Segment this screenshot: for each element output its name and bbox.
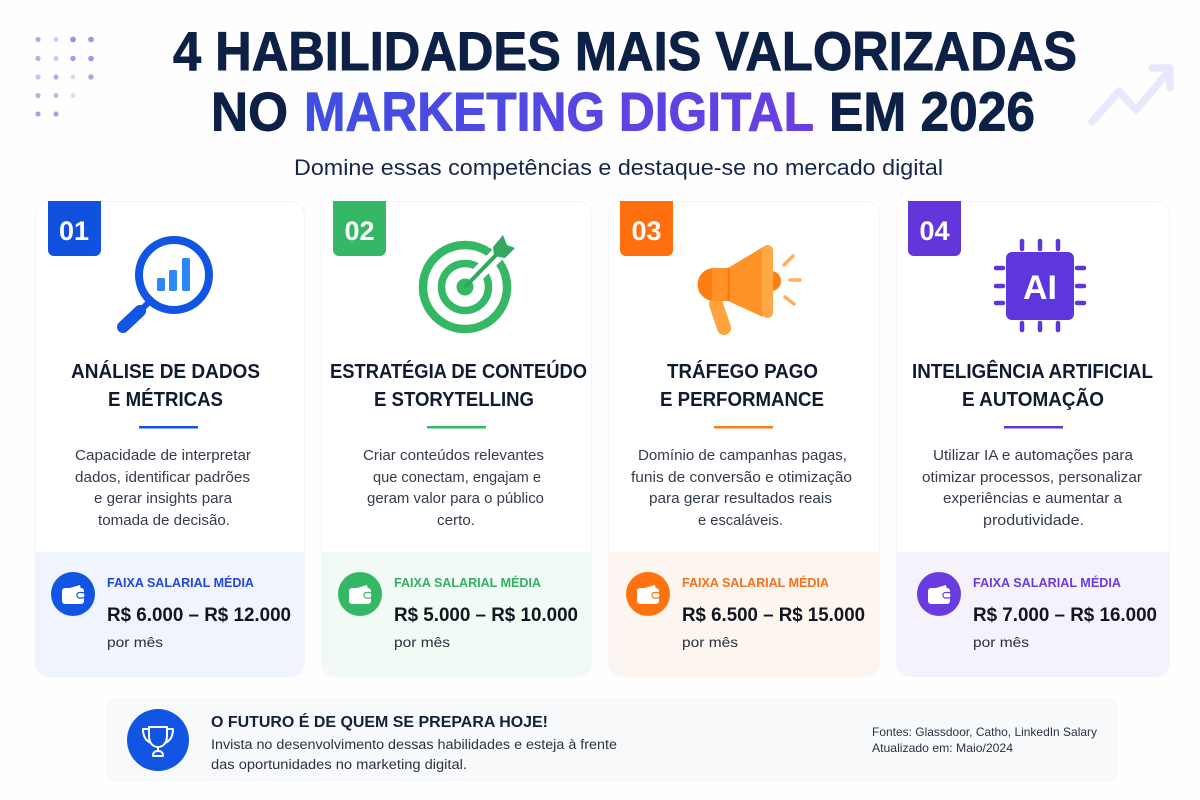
sources: Atualizado em: Maio/2024 (872, 741, 1013, 755)
salary: R$ 7.000 – R$ 16.000 (973, 604, 1157, 626)
salary panel background (322, 552, 592, 677)
description (631, 448, 852, 529)
description: produtividade. (983, 513, 1084, 529)
salary: FAIXA SALARIAL MÉDIA (973, 575, 1121, 590)
card background (36, 202, 304, 676)
heading: E STORYTELLING (374, 389, 534, 411)
callout text: das oportunidades no marketing digital. (211, 757, 467, 772)
heading (660, 360, 824, 411)
panel: footer callout (107, 698, 1117, 782)
panel: card 04 (896, 201, 1170, 677)
heading: INTELIGÊNCIA ARTIFICIAL (912, 359, 1153, 383)
title: 4 HABILIDADES MAIS VALORIZADAS (173, 20, 1077, 82)
description: otimizar processos, personalizar (922, 470, 1142, 486)
icon: AI chip: AI (1023, 269, 1057, 307)
description: Domínio de campanhas pagas, (638, 448, 847, 464)
salary (973, 575, 1157, 650)
title: NO (211, 80, 288, 142)
salary (107, 575, 291, 650)
salary: por mês (973, 634, 1029, 650)
card background (322, 202, 592, 676)
description: Criar conteúdos relevantes (363, 448, 544, 464)
decorative dot grid (35, 37, 94, 117)
title: EM 2026 (829, 80, 1035, 142)
description: que conectam, engajam e (373, 470, 541, 486)
description: experiências e aumentar a (943, 491, 1123, 507)
number badge (620, 201, 673, 256)
heading: E AUTOMAÇÃO (962, 388, 1104, 411)
icon: AI chip (996, 241, 1084, 330)
salary panel background (609, 552, 880, 677)
icon: trophy (127, 709, 189, 771)
number badge: 03 (631, 216, 662, 246)
number badge (48, 201, 101, 256)
salary: R$ 6.500 – R$ 15.000 (682, 604, 865, 626)
description: para gerar resultados reais (649, 491, 832, 507)
callout text: Invista no desenvolvimento dessas habilidades e esteja à frente (211, 737, 617, 752)
title: MARKETING DIGITAL (304, 80, 814, 142)
salary: FAIXA SALARIAL MÉDIA (394, 575, 541, 590)
salary (682, 575, 865, 650)
title (173, 20, 1077, 142)
heading: ESTRATÉGIA DE CONTEÚDO (330, 359, 587, 383)
salary panel background (897, 552, 1170, 677)
sources (872, 725, 1097, 755)
salary: R$ 5.000 – R$ 10.000 (394, 604, 578, 626)
heading (912, 359, 1153, 411)
description: funis de conversão e otimização (631, 470, 852, 486)
salary: FAIXA SALARIAL MÉDIA (682, 575, 829, 590)
callout text (211, 737, 617, 772)
description (363, 448, 544, 529)
heading (71, 360, 260, 411)
salary: R$ 6.000 – R$ 12.000 (107, 604, 291, 626)
description: geram valor para o público (367, 491, 544, 507)
description: Utilizar IA e automações para (933, 448, 1134, 464)
heading: E PERFORMANCE (660, 389, 824, 411)
salary panel background (36, 552, 304, 677)
description: certo. (437, 513, 475, 529)
callout heading: O FUTURO É DE QUEM SE PREPARA HOJE! (211, 712, 548, 731)
panel: card 03 (608, 201, 880, 677)
icon: wallet (338, 572, 382, 616)
salary: FAIXA SALARIAL MÉDIA (107, 575, 254, 590)
salary: por mês (682, 634, 738, 650)
number badge: 04 (919, 216, 950, 246)
panel: card 02 (322, 201, 592, 677)
number badge (908, 201, 961, 256)
subtitle: Domine essas competências e destaque-se no mercado digital (294, 155, 943, 180)
description: e gerar insights para (94, 491, 233, 507)
heading: TRÁFEGO PAGO (667, 360, 818, 383)
salary: por mês (394, 634, 450, 650)
heading: E MÉTRICAS (108, 388, 223, 411)
salary (394, 575, 578, 650)
description: e escaláveis. (698, 513, 783, 529)
decorative rising arrow (1092, 68, 1170, 122)
card background (608, 202, 880, 676)
description: dados, identificar padrões (75, 470, 250, 486)
description (922, 448, 1142, 529)
icon: wallet (917, 572, 961, 616)
number badge: 02 (344, 216, 375, 246)
description: Capacidade de interpretar (75, 448, 251, 464)
description (75, 448, 251, 529)
number badge (333, 201, 386, 256)
panel: card 01 (36, 201, 304, 677)
card background (896, 202, 1170, 676)
sources: Fontes: Glassdoor, Catho, LinkedIn Salary (872, 725, 1097, 739)
heading (330, 359, 587, 411)
heading: ANÁLISE DE DADOS (71, 360, 260, 383)
icon: magnifier with bars (123, 240, 209, 327)
salary: por mês (107, 634, 163, 650)
description: tomada de decisão. (98, 513, 230, 529)
icon: wallet (51, 572, 95, 616)
number badge: 01 (59, 216, 89, 246)
icon: target with arrow (423, 235, 515, 329)
icon: wallet (626, 572, 670, 616)
icon: megaphone (698, 245, 800, 328)
